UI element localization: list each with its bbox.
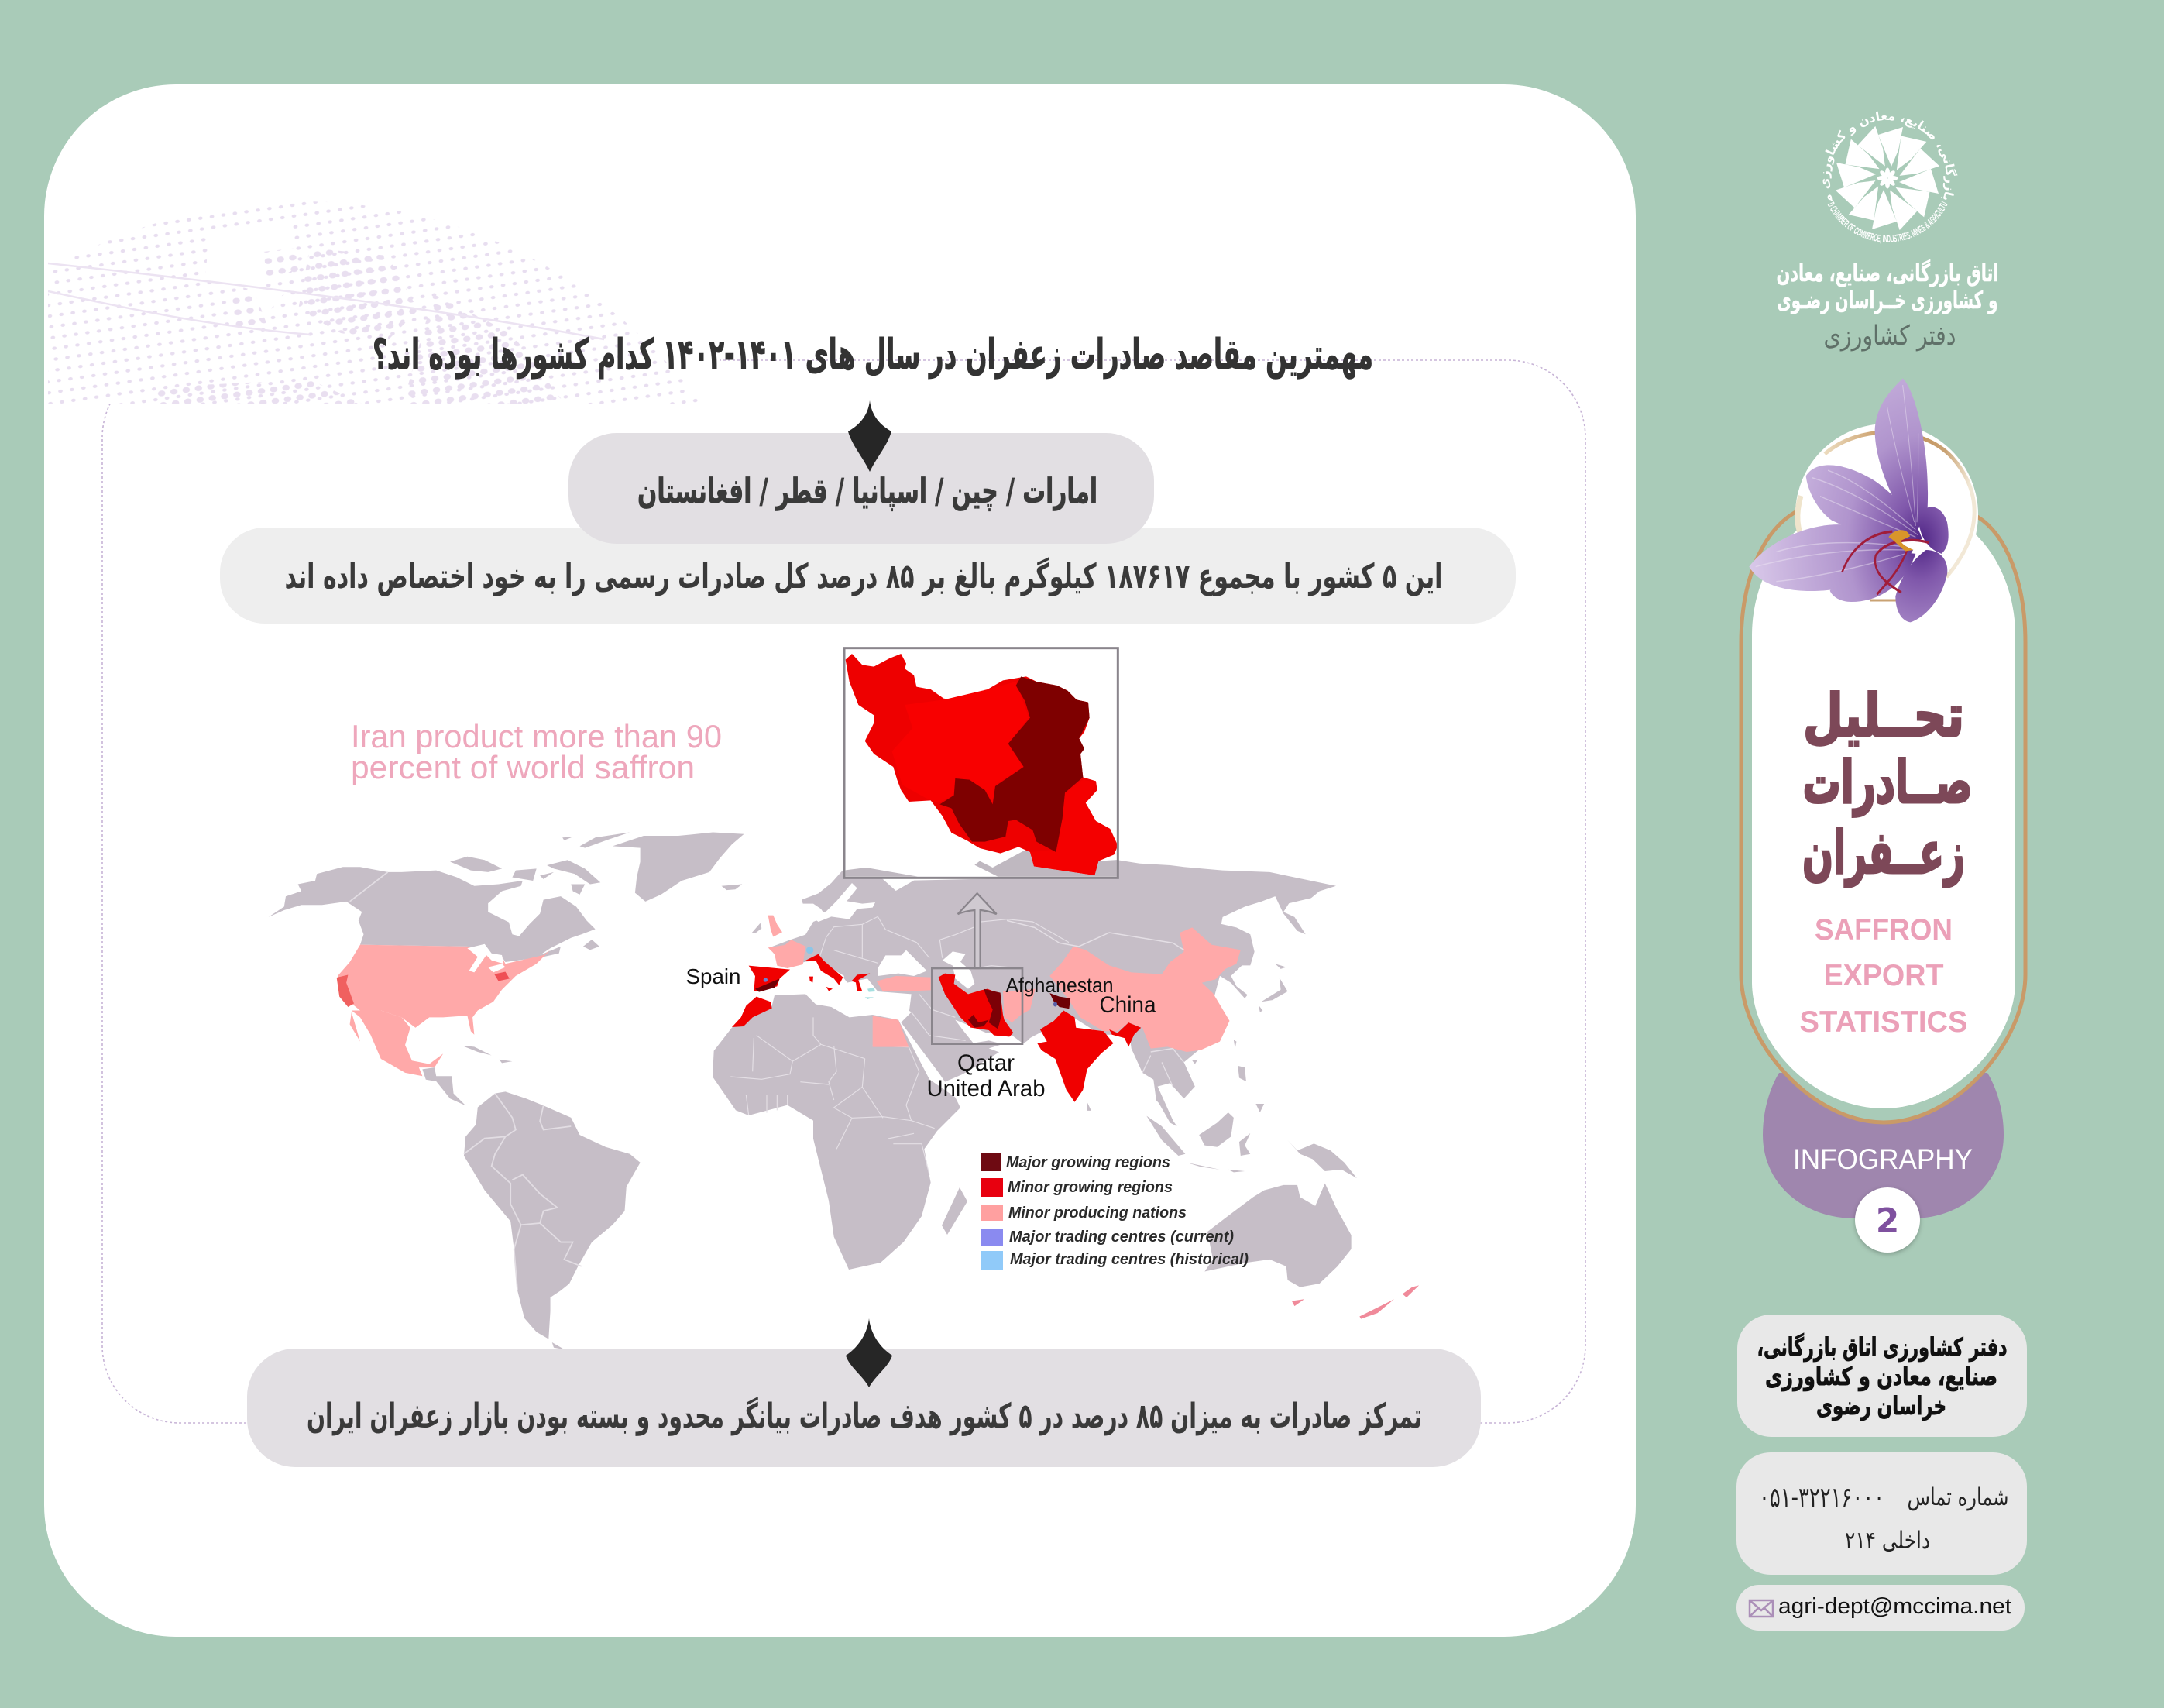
infography badge bbox=[1763, 1073, 2004, 1218]
department name: دفتر کشاورزی bbox=[1823, 321, 1956, 352]
country labels: Qatar bbox=[957, 1050, 1015, 1076]
Persian main title: تحــلیل bbox=[1803, 681, 1964, 750]
map caption: Iran product more than 90 bbox=[351, 718, 722, 754]
arrow marker: bottom bbox=[846, 1318, 892, 1387]
contact box: email: agri-dept@mccima.net bbox=[1778, 1594, 2011, 1619]
contact box: office name: صنایع، معادن و کشاورزی bbox=[1765, 1362, 1997, 1391]
decorative dotted globe bbox=[48, 201, 720, 404]
country labels bbox=[686, 964, 1156, 1101]
Africa, Europe and Middle East overlays bbox=[713, 916, 1069, 1270]
arch panel white bbox=[1752, 424, 2015, 1108]
inset map of Iran bbox=[844, 648, 1118, 878]
English title: SAFFRON bbox=[1815, 913, 1953, 947]
petals bbox=[1749, 379, 1949, 622]
gold ring bbox=[1798, 432, 1974, 600]
question heading: مهمترین مقاصد صادرات زعفران در سال های ۱۴۰۱-۱۴۰۲ کدام کشورها بوده اند؟ bbox=[373, 330, 1373, 379]
legend swatches bbox=[981, 1153, 1003, 1270]
organisation name: و کشاورزی خــراسان رضـوی bbox=[1777, 287, 1998, 314]
petal veins bbox=[1756, 385, 1918, 582]
map caption: percent of world saffron bbox=[351, 749, 695, 785]
pill: destination countries bbox=[568, 433, 1154, 544]
contact box: phone: ۰۵۱-۳۲۲۱۶۰۰۰ bbox=[1759, 1482, 1884, 1514]
country labels: Afghanestan bbox=[1005, 974, 1114, 997]
arch panel gold outline bbox=[1741, 511, 2025, 1122]
seas cut out of Eurasia bbox=[772, 883, 1022, 1044]
pill: five-country summary bbox=[220, 528, 1516, 624]
icon: envelope bbox=[1750, 1600, 1773, 1617]
pill: destination countries: امارات / چین / اسپانیا / قطر / افغانستان bbox=[637, 472, 1097, 511]
main white panel bbox=[44, 84, 1636, 1637]
map caption bbox=[351, 718, 722, 785]
pill: five-country summary: این ۵ کشور با مجموع ۱۸۷۶۱۷ کیلوگرم بالغ بر ۸۵ درصد کل صادرات رسمی را به خود اختصاص داده اند bbox=[285, 556, 1442, 596]
contact box: email bbox=[1736, 1585, 2025, 1631]
organisation name: اتاق بازرگانی، صنایع، معادن bbox=[1777, 259, 1998, 287]
arrow from locator to inset bbox=[958, 893, 997, 968]
legend labels: Major trading centres (historical) bbox=[1010, 1251, 1249, 1268]
stigma threads bbox=[1842, 531, 1929, 594]
legend labels: Major trading centres (current) bbox=[1009, 1229, 1234, 1246]
chamber logo bbox=[1823, 112, 1958, 243]
issue number: 2 bbox=[1876, 1201, 1899, 1241]
Persian main title: صــادرات bbox=[1803, 747, 1972, 817]
locator box on Iran bbox=[932, 968, 1022, 1044]
English title: STATISTICS bbox=[1800, 1005, 1967, 1039]
world map of saffron production bbox=[269, 648, 1419, 1349]
arrow marker: top bbox=[848, 400, 891, 472]
pill: conclusion bbox=[247, 1349, 1481, 1467]
English title bbox=[1800, 913, 1967, 1039]
English title: EXPORT bbox=[1823, 959, 1944, 992]
contact box: phone: داخلی ۲۱۴ bbox=[1845, 1527, 1930, 1555]
Eurasia west, Middle East base bbox=[751, 869, 1084, 1082]
contact box: office name: خراسان رضوی bbox=[1816, 1391, 1946, 1421]
contact box: phone bbox=[1736, 1452, 2027, 1575]
country labels: China bbox=[1100, 992, 1156, 1018]
legend labels: Minor growing regions bbox=[1008, 1179, 1173, 1196]
country labels: Spain bbox=[686, 964, 740, 988]
locator box and arrow bbox=[932, 893, 1022, 1044]
China, India and Oceania overlays bbox=[1007, 920, 1419, 1319]
Eurasia east base and islands bbox=[1007, 860, 1357, 1287]
contact box: office name: دفتر کشاورزی اتاق بازرگانی، bbox=[1757, 1332, 2008, 1362]
Americas bbox=[269, 833, 744, 1349]
contact box: phone: شماره تماس bbox=[1907, 1483, 2009, 1511]
legend labels: Minor producing nations bbox=[1008, 1205, 1187, 1222]
dashed content frame bbox=[102, 360, 1585, 1423]
contact box: office name bbox=[1737, 1315, 2027, 1437]
organisation name bbox=[1777, 259, 1998, 314]
infography badge: INFOGRAPHY bbox=[1793, 1143, 1973, 1175]
saffron flower bbox=[1749, 379, 1949, 622]
Persian main title bbox=[1802, 681, 1972, 888]
legend labels: Major growing regions bbox=[1006, 1154, 1170, 1171]
anther bbox=[1888, 530, 1914, 551]
legend labels bbox=[1006, 1154, 1249, 1268]
country labels: United Arab bbox=[926, 1076, 1046, 1101]
pill: conclusion: تمرکز صادرات به میزان ۸۵ درصد در ۵ کشور هدف صادرات بیانگر محدود و بسته بودن بازار زعفران ایران bbox=[307, 1396, 1422, 1436]
issue number bbox=[1855, 1187, 1920, 1253]
Persian main title: زعــفران bbox=[1802, 818, 1965, 888]
